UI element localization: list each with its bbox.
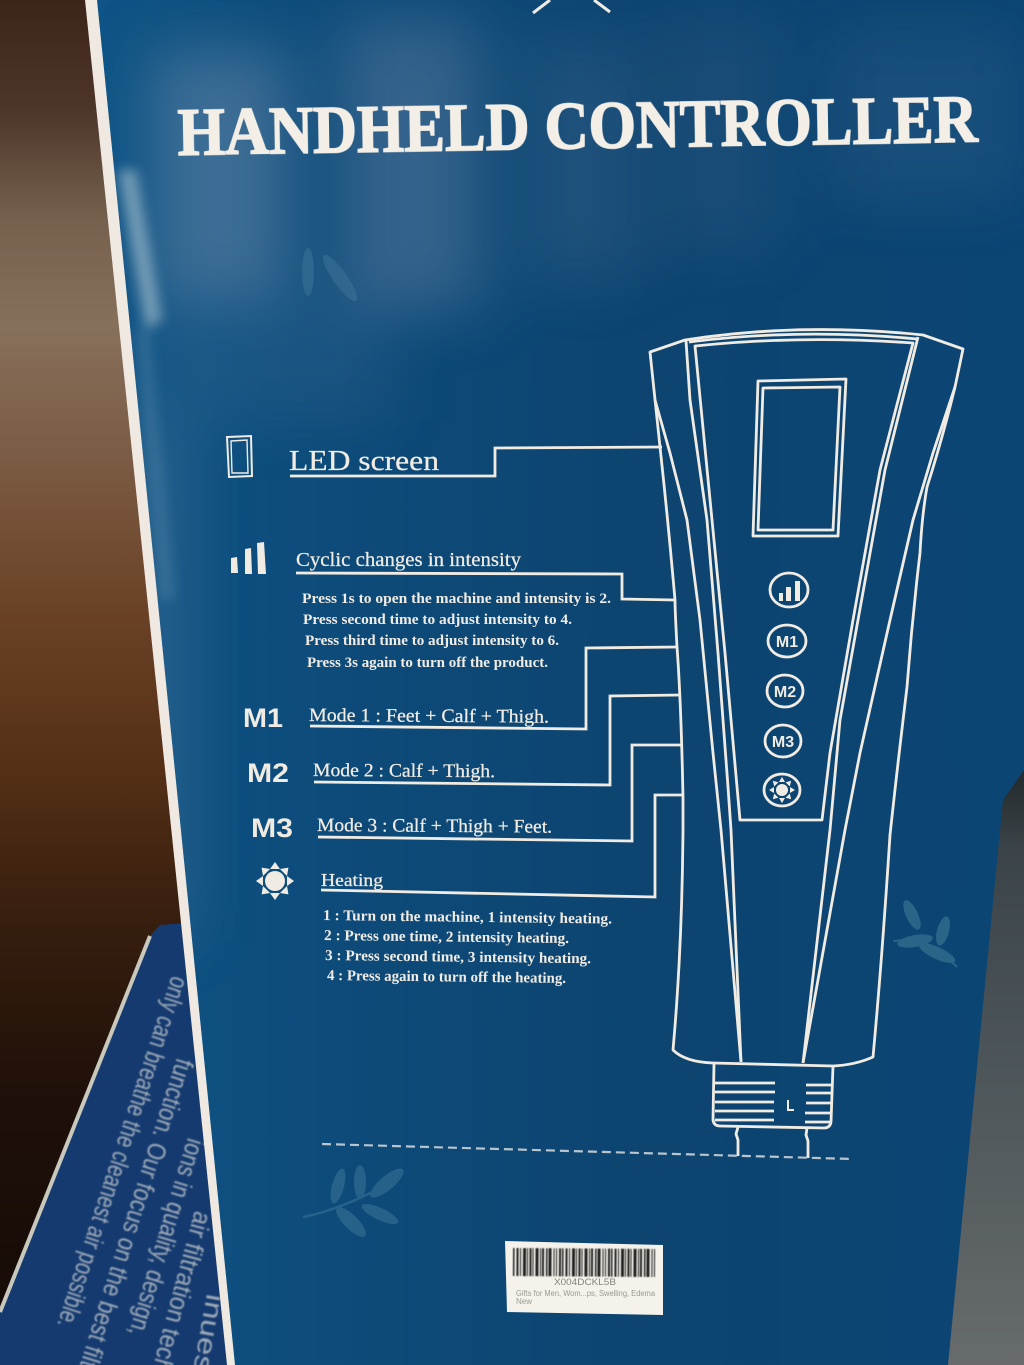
rotated text on back box: inues [188,1292,231,1365]
threaded collar [713,1064,833,1128]
icon: bars [231,542,266,574]
barcode id: X004DCKL5B [554,1277,616,1287]
connector: heating [321,795,682,897]
heading text: Heating [321,870,383,890]
label: mode 1: M1 [243,703,283,733]
button: M1: M1 [776,634,798,651]
right inner curve [803,387,955,1063]
dashed base line [322,1144,853,1159]
instructions: Press third time to adjust intensity to 6. [305,633,559,649]
label: mode 2: Mode 2 : Calf + Thigh. [313,760,495,782]
label: heating [256,795,682,987]
instructions [302,591,611,671]
second box behind, with rotated text [0,923,236,1365]
instructions: 2 : Press one time, 2 intensity heating. [324,928,569,947]
bright streak along left edge [118,170,162,330]
button: heat [764,774,800,806]
top emblem fragment [533,0,610,13]
label: mode 1 [243,647,677,733]
leaf decoration: right [893,898,958,967]
label: mode 2: M2 [247,758,289,788]
label: mode 2 [247,695,680,788]
button: M1 [768,625,806,657]
leaf decoration: bottom [303,1164,408,1241]
barcode description: Gifts for Men, Wom...ps, Swelling, Edema [516,1289,656,1298]
label: mode 1: Mode 1 : Feet + Calf + Thigh. [309,705,549,728]
right panel line [803,337,918,1063]
controller body outline [650,330,963,1066]
connector: intensity [296,573,675,600]
leaf decoration: top [302,248,362,305]
button: M3: M3 [772,734,794,751]
second top arc [689,334,917,342]
instructions: 1 : Turn on the machine, 1 intensity heating. [323,908,612,928]
connector: LED [290,447,662,476]
heading text: Cyclic changes in intensity [296,549,522,571]
LED screen text: LED screen [289,445,440,477]
barcode bars [513,1262,656,1263]
label: mode 3: M3 [251,813,293,843]
icon: screen [227,436,252,477]
button: M2: M2 [774,684,796,701]
left inner curve [655,400,741,1062]
icon: sun [256,862,294,900]
controller illustration [650,330,963,1158]
instructions: Press second time to adjust intensity to 4. [303,612,572,628]
cables [736,1127,808,1158]
left panel line [686,341,741,1062]
button: intensity [770,573,808,607]
instructions: Press 3s again to turn off the product. [307,655,548,671]
barcode condition: New [516,1297,532,1306]
front box: white edge [85,0,236,1365]
button: M2 [767,675,803,707]
rotated text on back box [51,973,231,1365]
glare reflections [120,20,1020,940]
barcode label [505,1241,663,1315]
label: LED screen [227,436,662,477]
background: grey surface at right [940,760,1024,1365]
centre panel [695,340,913,820]
screen [753,379,846,536]
button: M3 [765,725,801,757]
instructions: 3 : Press second time, 3 intensity heating. [325,948,591,967]
label: mode 3 [251,745,681,843]
instructions: 4 : Press again to turn off the heating. [327,968,566,987]
label: mode 3: Mode 3 : Calf + Thigh + Feet. [317,815,552,838]
label: cyclic changes in intensity [231,542,675,671]
instructions [323,908,612,987]
instructions: Press 1s to open the machine and intensity is 2. [302,591,611,607]
